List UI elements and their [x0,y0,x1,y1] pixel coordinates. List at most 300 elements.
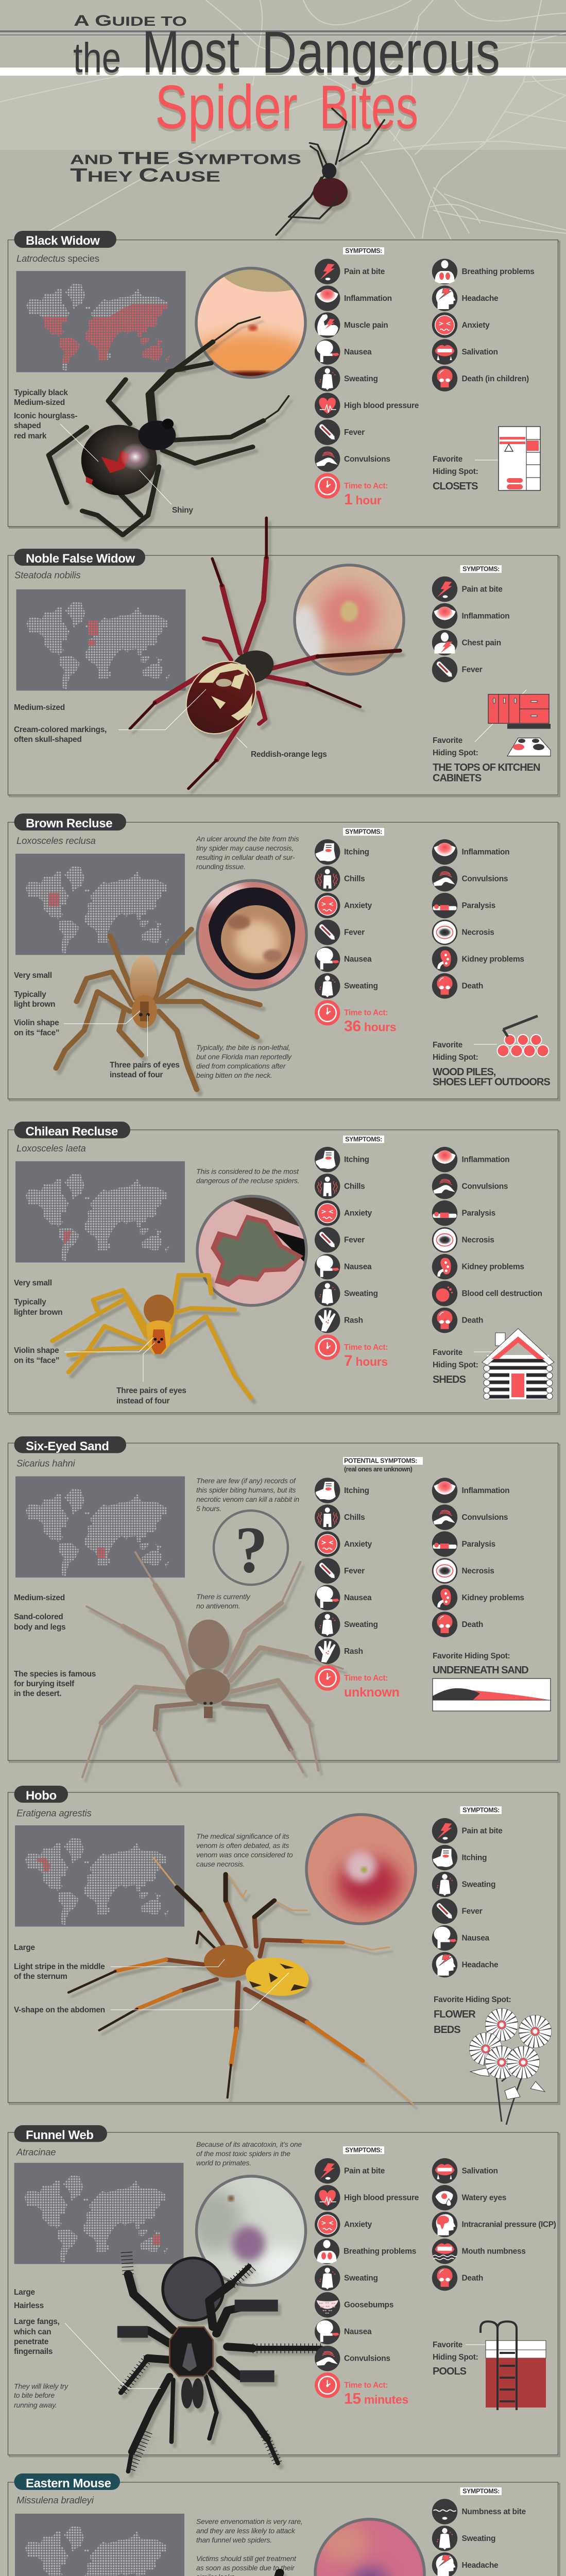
note: bite: They will likely try [14,2382,68,2391]
text: brown recluse traits [14,971,180,1079]
pill heading: Brown Recluse: Brown Recluse [26,817,112,831]
hiding spot text: Favorite Hiding Spot: [433,1652,510,1660]
symptoms list: Convulsions [461,875,508,884]
symptoms list: Goosebumps [344,2301,393,2310]
text: funnel web traits: penetrate [14,2337,49,2346]
time to act [315,2372,408,2408]
symptoms list: Death [461,1620,483,1629]
symptoms list: Anxiety [344,902,372,910]
text: brown recluse traits: on its “face” [14,1029,59,1038]
range map [15,854,185,955]
text: noble false widow traits: Reddish-orange legs [251,750,327,759]
symptoms list: Pain at bite [344,2167,385,2176]
callout lines [64,1337,497,1382]
symptoms list: Kidney problems [461,955,524,964]
hiding spot text: BEDS [434,2024,460,2036]
text: brown recluse traits: light brown [14,1000,55,1009]
species name: Eratigena agrestis [16,1807,92,1819]
hiding spot text [433,736,540,784]
hiding spot text [433,1348,478,1385]
symptoms list: Sweating [344,1290,378,1298]
pill heading: Six-Eyed Sand [14,1436,126,1453]
pill heading: Noble False Widow [14,549,145,566]
note: florida: Typically, the bite is non-lethal, [196,1043,290,1052]
hiding spot text: CABINETS [433,773,482,784]
text: hobo traits: Large [14,1943,35,1952]
title shadow: the Most Dangerous: Most [142,22,239,88]
hiding spot text: FLOWER [434,2009,476,2020]
time to act: 1 hour [344,491,382,508]
spider: eastern mouse [143,2573,363,2576]
symptoms list: Salivation [461,348,498,357]
symptoms list: Fever [344,428,365,437]
pill heading: Hobo: Hobo [26,1789,57,1803]
note: Because of its atracotoxin, it’s one [196,2140,302,2148]
text: funnel web traits: which can [13,2328,51,2336]
range map [15,2514,184,2576]
species name: Sicarius hahni [16,1458,75,1468]
symptoms list [432,577,509,682]
pill heading: Chilean Recluse: Chilean Recluse [26,1125,118,1139]
symptoms list: Itching [344,848,369,857]
note: as soon as possible due to their [196,2564,295,2572]
symptoms list: Rash [344,1647,363,1656]
range map [15,1477,185,1578]
question mark in place of bite photo [214,1511,288,1586]
note: necrotic venom can kill a rabbit in [196,1495,299,1503]
bite photo [195,267,307,379]
note: than funnel web spiders. [196,2536,272,2544]
text: brown recluse traits: Three pairs of eyes [110,1061,180,1070]
pill heading: Black Widow [14,231,116,248]
note: antivenom: no antivenom. [196,1602,240,1610]
text: black widow traits: shaped [14,421,41,430]
bite photo [190,2174,308,2287]
symptoms label [343,1457,423,1473]
symptoms list: Chills [344,1182,365,1191]
note: florida: died from complications after [196,1062,286,1070]
symptoms label: (real ones are unknown) [344,1466,413,1473]
text: six-eyed sand traits: for burying itself [14,1680,75,1688]
hiding spot text: Favorite [433,2341,463,2349]
hiding spot text [433,1041,550,1088]
symptoms list: Anxiety [344,1209,372,1218]
bite photo [195,1194,308,1308]
note [196,1832,293,1868]
callout lines [65,2323,161,2388]
time to act: Time to Act: [344,1674,388,1683]
text: chilean recluse traits: instead of four [116,1397,169,1405]
symptoms label: POTENTIAL SYMPTOMS: [344,1457,417,1464]
text: chilean recluse traits: Very small [14,1279,52,1287]
text: six-eyed sand traits: Sand-colored [14,1613,63,1621]
note: ulcer: An ulcer around the bite from this [196,835,299,843]
title line: A Guide To: A G UIDE TO [74,12,187,29]
callout lines [118,689,526,748]
symptoms list: Death (in children) [461,375,529,383]
symptoms list: Breathing problems [461,267,535,276]
hiding spot text: SHOES LEFT OUTDOORS [433,1077,550,1088]
symptoms list: Necrosis [461,1236,494,1245]
note: bite: running away. [14,2401,57,2409]
text: black widow traits: Medium-sized [14,398,65,407]
symptoms list: Sweating [344,982,378,991]
pill heading: Funnel Web: Funnel Web [26,2128,94,2142]
spider: black widow [49,317,289,535]
panel: Hobo [8,1786,559,2125]
symptoms list: Fever [344,1567,365,1575]
symptoms list: Nausea [344,348,372,357]
icon: shed [482,1328,554,1399]
panel: Funnel Web [8,2125,559,2471]
text: funnel web traits: Hairless [14,2301,44,2310]
symptoms list: Watery eyes [461,2194,506,2202]
hiding spot text: Hiding Spot: [433,1053,478,1062]
symptoms list: Intracranial pressure (ICP) [461,2221,556,2229]
symptoms list: Headache [461,1961,499,1970]
hiding spot text: Hiding Spot: [433,467,478,476]
symptoms list: Chest pain [461,639,501,647]
title: the Most Dangerous: Dangerous [262,20,500,86]
symptoms list: Fever [461,666,483,674]
symptoms list: Convulsions [461,1513,508,1522]
note: florida: but one Florida man reportedly [196,1053,292,1061]
symptoms list: Inflammation [461,848,509,857]
pill heading: Noble False Widow: Noble False Widow [26,552,135,566]
hiding spot text: CLOSETS [433,481,478,492]
symptoms list: Convulsions [461,1182,508,1191]
text: funnel web traits: Large fangs, [14,2317,60,2326]
symptoms list [315,1147,542,1333]
pill heading: Funnel Web [14,2125,107,2142]
note: dangerous of the recluse spiders. [196,1177,299,1185]
symptoms list: Convulsions [344,455,390,464]
symptoms list: Anxiety [344,2221,372,2229]
text: chilean recluse traits [14,1279,186,1405]
species name: Loxosceles reclusa [16,835,96,846]
hiding spot text: POOLS [433,2366,467,2377]
note: Severe envenomation is very rare, [196,2517,303,2526]
symptoms list: Nausea [344,2328,372,2336]
text: brown recluse traits: Very small [14,971,52,980]
text: black widow traits: red mark [14,432,47,440]
title: Spider Bites [155,73,418,142]
text: black widow traits: Iconic hourglass- [14,412,77,420]
symptoms list: Itching [344,1156,369,1164]
hiding spot text: UNDERNEATH SAND [433,1665,528,1676]
note: ulcer: tiny spider may cause necrosis, [196,844,294,852]
text: chilean recluse traits: lighter brown [14,1308,62,1317]
text: chilean recluse traits: on its “face” [14,1356,59,1365]
symptoms list [315,839,524,998]
pill heading: Chilean Recluse [14,1122,130,1139]
text: funnel web traits: Large [14,2288,35,2297]
hiding spot text: WOOD PILES, [433,1066,496,1078]
note: ulcer: rounding tissue. [196,862,246,871]
text: six-eyed sand traits [14,1594,96,1698]
note: and they are less likely to attack [196,2527,296,2535]
symptoms list: Rash [344,1316,363,1325]
symptoms list: Blood cell destruction [461,1290,542,1298]
symptoms list: Sweating [461,1880,495,1889]
time to act: Time to Act: [344,482,388,490]
note: ulcer [196,835,299,871]
note [196,1167,299,1185]
symptoms list: Pain at bite [461,1827,503,1836]
species name: Steatoda nobilis [14,570,80,580]
note: Victims should still get treatment [196,2554,297,2563]
symptoms list: Fever [461,1907,483,1916]
panel: Noble False Widow [8,518,559,796]
hiding spot text: Favorite [433,455,463,464]
spider: chilean recluse [53,1275,251,1398]
symptoms list: Nausea [461,1934,490,1943]
pill heading: Black Widow: Black Widow [26,234,100,248]
hiding spot text [434,1995,511,2036]
header: title area [0,0,566,240]
hiding spot text: SHEDS [433,1374,466,1385]
spider: funnel web [117,2250,321,2471]
note: antivenom [196,1592,251,1610]
note [196,2140,302,2167]
symptoms list: Nausea [344,1594,372,1602]
symptoms list: Kidney problems [461,1594,524,1602]
symptoms list: Inflammation [344,294,392,303]
text: six-eyed sand traits: body and legs [14,1623,65,1632]
note: world to primates. [196,2159,251,2167]
symptoms list: Headache [461,294,499,303]
pill heading: Six-Eyed Sand: Six-Eyed Sand [26,1439,109,1453]
species name: Latrodectus species [16,253,99,264]
subtitle: and the symptoms they cause [70,148,301,186]
time to act: 7 hours [344,1352,388,1369]
note: The medical significance of its [196,1832,289,1840]
title: the Most Dangerous: Most [142,19,239,85]
hiding spot text: Favorite [433,1041,463,1049]
note: florida: being bitten on the neck. [196,1071,272,1079]
symptoms list: Death [461,1316,483,1325]
note: bite [14,2382,68,2409]
text: chilean recluse traits: Typically [14,1298,46,1307]
icon: kitchen cabinets [488,694,551,729]
spider: hobo [68,1858,414,2104]
panel: Brown Recluse [8,814,559,1100]
pill heading: Hobo [14,1786,68,1803]
title shadow: Spider Bites: Spider [155,75,298,144]
title shadow: the Most Dangerous [73,22,500,88]
time to act: Time to Act: [344,2381,388,2390]
pill heading: Eastern Mouse: Eastern Mouse [26,2477,111,2490]
question mark in place of bite photo: ? [235,1513,268,1586]
icon: flowers [469,2008,552,2125]
bite photo [195,878,308,992]
symptoms list: Pain at bite [461,585,503,594]
bite photo [313,2517,426,2576]
symptoms label: SYMPTOMS: [462,2487,500,2495]
text: six-eyed sand traits: Medium-sized [14,1594,65,1602]
symptoms list: Sweating [344,1620,378,1629]
symptoms list: Death [461,2274,483,2283]
panel: Eastern Mouse [8,2473,559,2576]
symptoms list: Paralysis [461,1209,495,1218]
text: six-eyed sand traits: The species is famous [14,1670,96,1679]
hiding spot text [433,2341,485,2377]
title: Spider Bites: Bites [319,73,418,142]
symptoms label: SYMPTOMS: [462,1806,500,1814]
text: chilean recluse traits: Three pairs of eyes [116,1386,186,1395]
note: venom is often debated, as its [196,1841,289,1850]
text: brown recluse traits: instead of four [110,1071,163,1079]
range map [15,1825,184,1927]
symptoms list: Pain at bite [344,267,385,276]
text: noble false widow traits: Cream-colored markings, [14,725,107,734]
subtitle: and the symptoms they cause: T HEY C AUSE [70,165,220,186]
symptoms label: SYMPTOMS: [345,1136,382,1143]
text: brown recluse traits: Violin shape [14,1019,59,1027]
note [196,2517,303,2576]
time to act: 36 hours [344,1018,396,1035]
title: the Most Dangerous: the [73,35,121,81]
time to act: 15 minutes [344,2391,408,2408]
range map [16,589,185,690]
symptoms list: Muscle pain [344,321,388,330]
symptoms label: SYMPTOMS: [345,2146,382,2154]
bite photo [304,1812,418,1926]
title shadow: Spider Bites [155,75,418,144]
hiding spot text: Hiding Spot: [433,1361,478,1369]
symptoms list: Nausea [344,955,372,964]
symptoms list: Fever [344,1236,365,1245]
time to act: Time to Act: [344,1343,388,1352]
species name: Loxosceles laeta [16,1143,86,1154]
symptoms list: Itching [461,1854,487,1862]
symptoms list: Death [461,982,483,991]
title shadow: the Most Dangerous: the [73,37,121,84]
hiding spot text: Favorite [433,1348,463,1357]
symptoms list: Paralysis [461,902,495,910]
text: funnel web traits [13,2288,60,2356]
text: hobo traits: V-shape on the abdomen [14,2006,105,2014]
text: noble false widow traits: Medium-sized [14,703,65,712]
note: bite: to bite before [14,2391,55,2399]
icon: wood pile [498,1016,549,1057]
text: chilean recluse traits: Violin shape [14,1346,59,1355]
symptoms list: Salivation [461,2167,498,2176]
time to act [315,473,388,508]
range map [15,1161,185,1262]
title shadow: the Most Dangerous: Dangerous [262,22,500,88]
spider: six-eyed sand [82,1552,343,1782]
symptoms list [432,2499,526,2576]
note: venom was once considered to [196,1851,293,1859]
symptoms list: Necrosis [461,928,494,937]
hiding spot text [433,455,478,492]
symptoms list: Chills [344,1513,365,1522]
symptoms list: Headache [461,2561,499,2570]
time to act: unknown [344,1685,400,1700]
time to act [315,1665,400,1700]
note: 5 hours. [196,1504,221,1513]
symptoms label: SYMPTOMS: [462,566,500,573]
icon: sand burrow [433,1679,551,1711]
symptoms list: Nausea [344,1263,372,1272]
species name: Missulena bradleyi [16,2495,94,2505]
symptoms label: SYMPTOMS: [345,828,382,836]
note: florida [196,1043,292,1079]
note: ulcer: resulting in cellular death of sur- [196,853,295,861]
symptoms list: Inflammation [461,1156,509,1164]
subtitle: and the symptoms they cause: AND THE S YMPTOMS [70,148,301,168]
note: antivenom: There is currently [196,1592,251,1601]
range map [14,2163,183,2264]
spider: brown recluse [56,929,260,1090]
symptoms list: Paralysis [461,1540,495,1549]
symptoms list: High blood pressure [344,401,419,410]
symptoms list: Necrosis [461,1567,494,1575]
title shadow: Spider Bites: Bites [319,75,418,144]
hiding spot text: THE TOPS OF KITCHEN [433,762,540,773]
callout lines [111,1959,289,2010]
title: Spider Bites: Spider [155,73,298,142]
pill heading: Brown Recluse [14,814,126,831]
text: black widow traits: Shiny [172,506,193,515]
note: cause necrosis. [196,1860,245,1868]
time to act [315,1000,396,1035]
text: hobo traits [14,1943,105,2014]
text: hobo traits: Light stripe in the middle [14,1962,105,1971]
hiding spot text: Hiding Spot: [433,749,478,757]
symptoms list: Mouth numbness [461,2247,526,2256]
callout lines [64,1011,147,1056]
text: six-eyed sand traits: in the desert. [14,1689,61,1698]
symptoms list [315,1478,524,1664]
note: this spider biting humans, but its [196,1486,296,1494]
note: of the most toxic spiders in the [196,2149,290,2158]
symptoms list [315,259,535,472]
spider: noble false widow [130,518,400,789]
time to act: Time to Act: [344,1009,388,1018]
icon: stove [507,738,551,756]
title: the Most Dangerous [73,19,500,86]
note: This is considered to be the most [196,1167,299,1176]
panel: Chilean Recluse [8,1122,559,1414]
illustration: header black widow [276,108,384,235]
text: funnel web traits: fingernails [14,2347,53,2356]
range map [16,271,185,372]
symptoms list: Anxiety [344,1540,372,1549]
hiding spot text: Favorite Hiding Spot: [434,1995,511,2004]
symptoms list: Inflammation [461,612,509,620]
symptoms list: Convulsions [344,2354,390,2363]
symptoms list: Inflammation [461,1486,509,1495]
symptoms list: Sweating [461,2534,495,2543]
symptoms list: Anxiety [461,321,490,330]
icon: closet [499,427,540,490]
text: noble false widow traits: often skull-shaped [14,735,82,744]
symptoms list: Fever [344,928,365,937]
text: brown recluse traits: Typically [14,990,46,999]
time to act [315,1334,388,1369]
hiding spot text: Hiding Spot: [433,2353,478,2362]
symptoms list: Kidney problems [461,1263,524,1272]
symptoms list [314,2158,556,2371]
symptoms label: SYMPTOMS: [345,247,382,255]
icon: pool [481,2321,546,2410]
hiding spot text: Favorite [433,736,463,745]
text: black widow traits: Typically black [14,388,68,397]
symptoms list: Sweating [344,375,378,383]
text: hobo traits: of the sternum [14,1972,67,1981]
